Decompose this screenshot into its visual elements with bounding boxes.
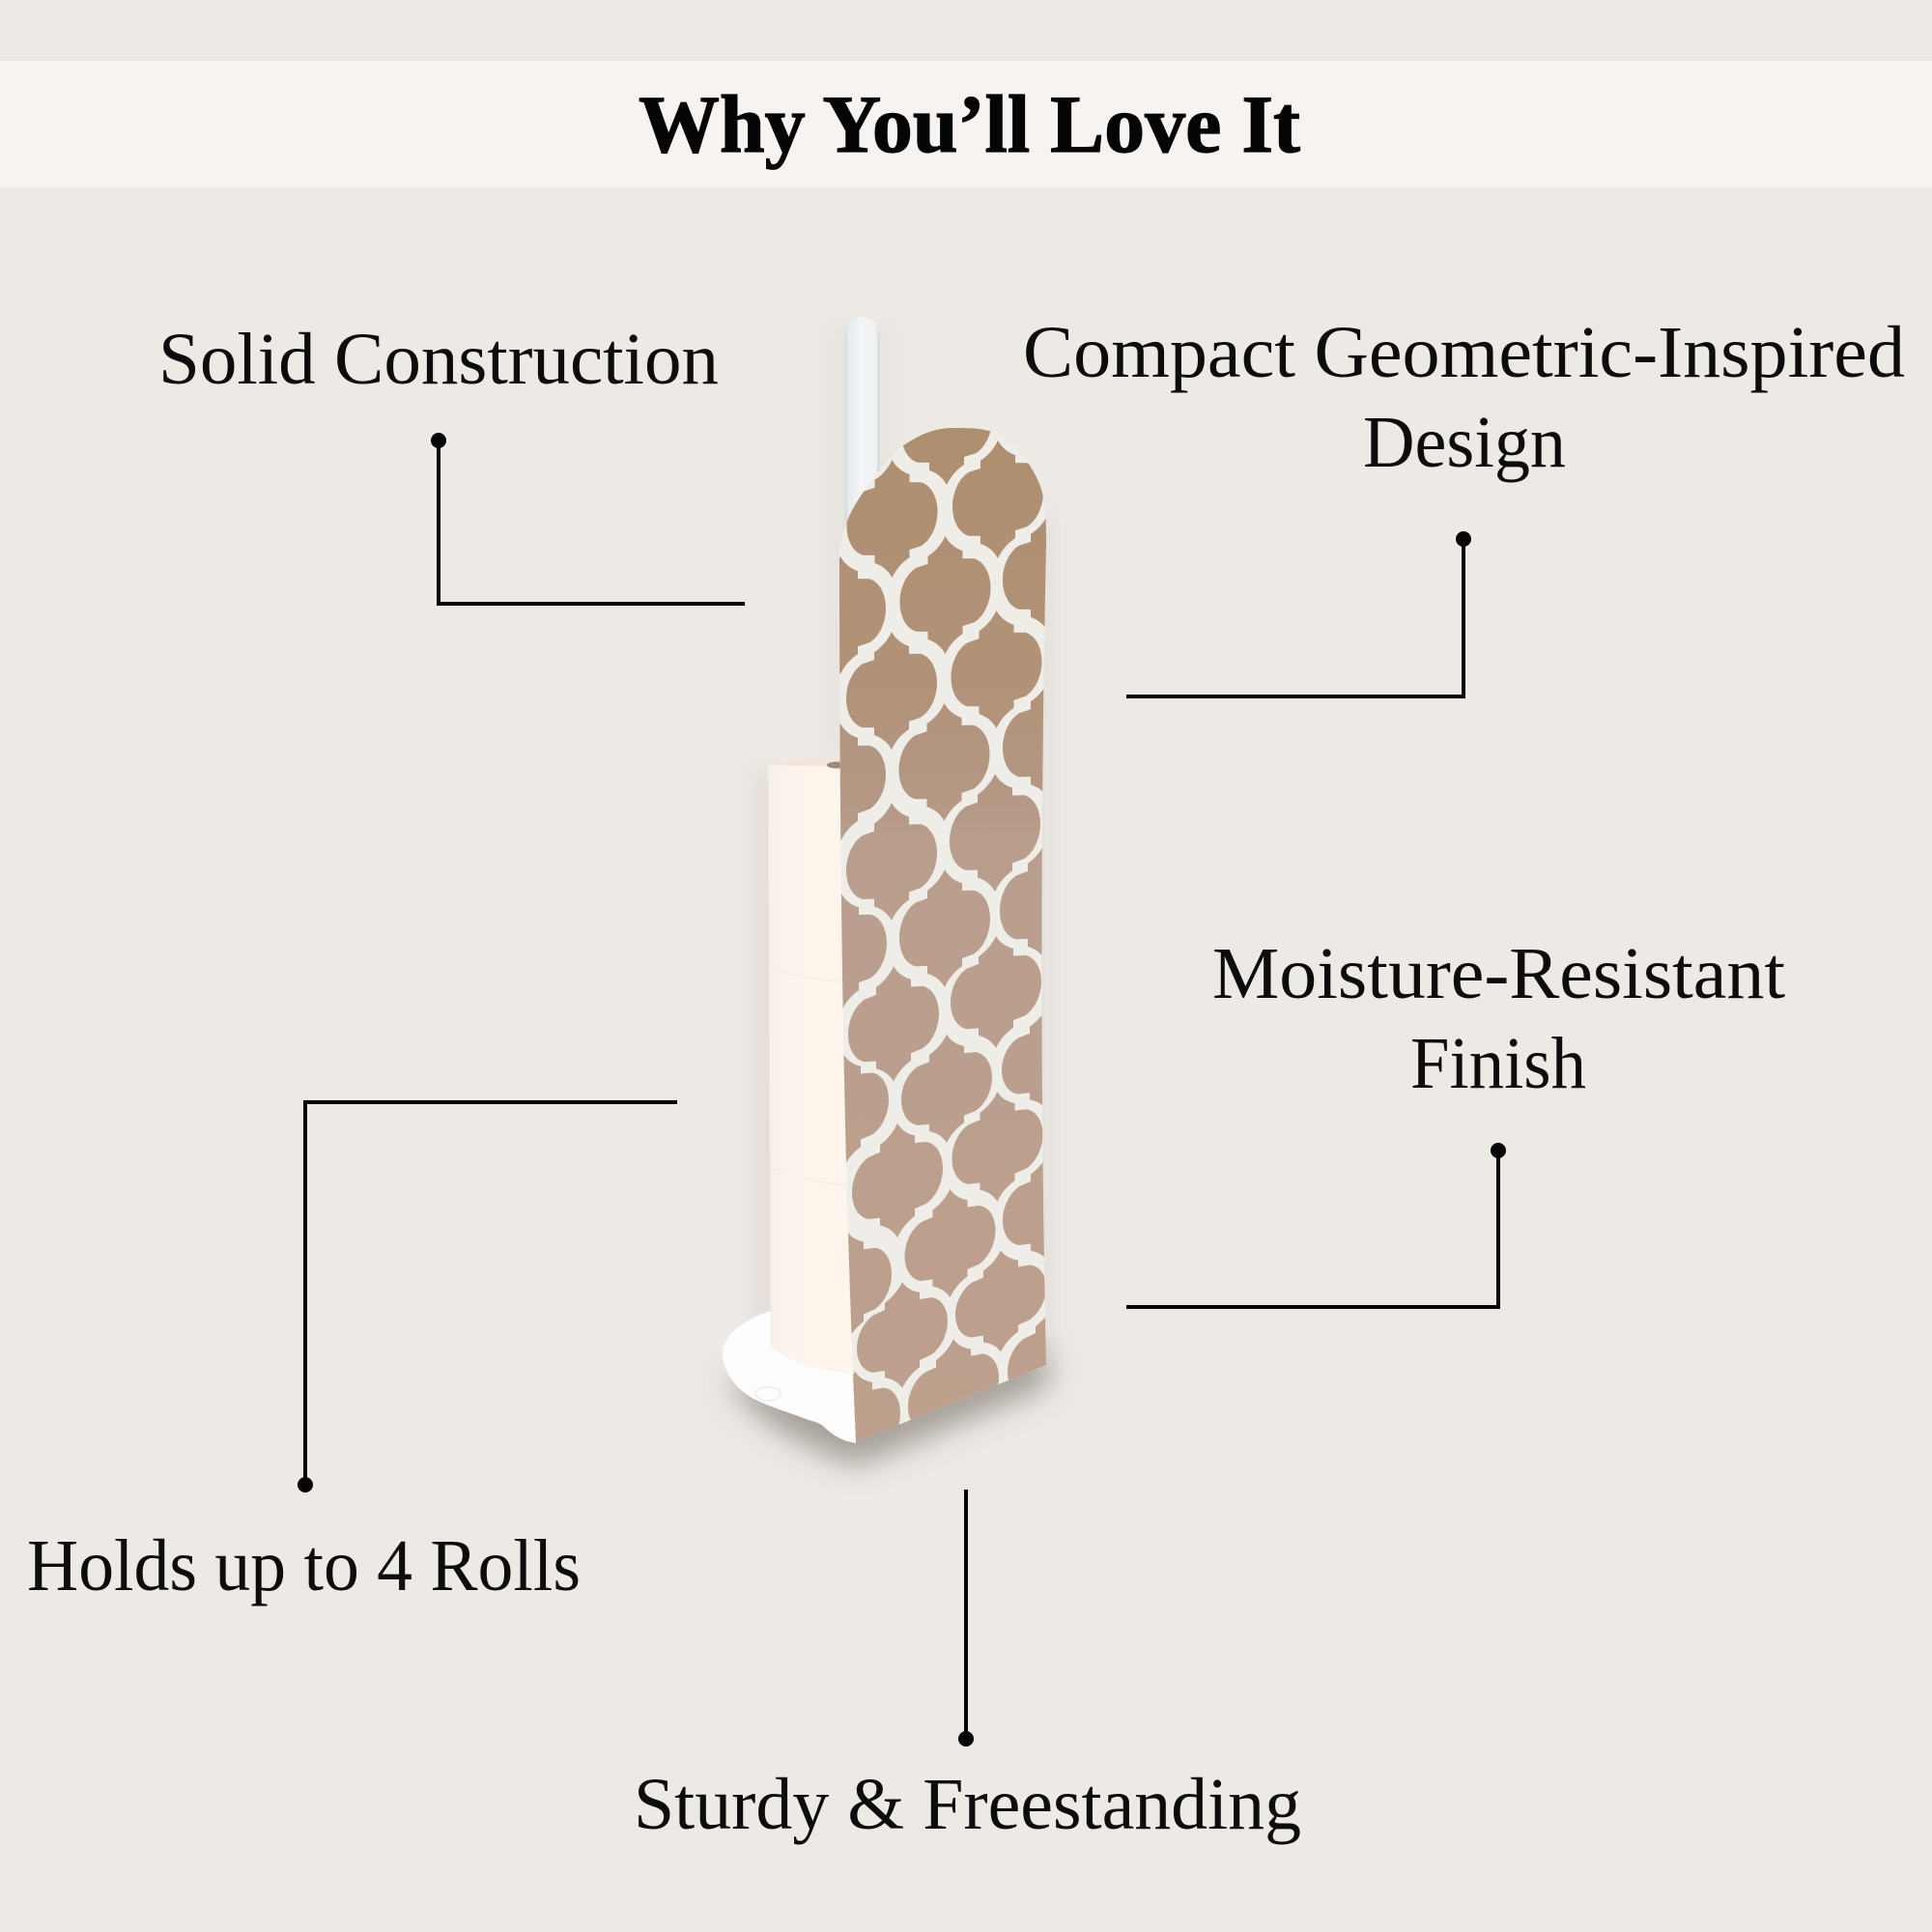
- label: Holds up to 4 Rolls: [27, 1525, 581, 1606]
- callout: holds up to 4 rolls: [27, 1102, 677, 1606]
- label: Compact Geometric-Inspired: [1023, 312, 1905, 393]
- label: [1212, 933, 1785, 1104]
- dot: [431, 433, 446, 448]
- label: Finish: [1410, 1023, 1586, 1104]
- base plate: [723, 1311, 869, 1443]
- leader line: [964, 1490, 968, 1739]
- title banner: [0, 61, 1932, 187]
- callout: compact design: [1023, 312, 1905, 696]
- callout: moisture-resistant finish: [1126, 933, 1785, 1307]
- label: Moisture-Resistant: [1212, 933, 1785, 1014]
- product: toilet paper holder: [723, 317, 1111, 1497]
- label: Solid Construction: [158, 319, 719, 400]
- pole: [845, 317, 879, 599]
- dot: [1491, 1143, 1506, 1158]
- label: [1023, 312, 1905, 483]
- label: Sturdy & Freestanding: [634, 1764, 1301, 1845]
- leader line: [439, 440, 745, 604]
- leader line: [1126, 1151, 1498, 1307]
- dot: [298, 1477, 313, 1492]
- dot: [1456, 531, 1471, 547]
- callout: solid construction: [158, 319, 745, 604]
- dot: [958, 1731, 974, 1747]
- leader line: [305, 1102, 677, 1485]
- product shadow: [726, 328, 1051, 1466]
- callout: sturdy and freestanding: [634, 1490, 1301, 1845]
- label: Design: [1363, 402, 1566, 483]
- lattice pattern: [839, 428, 1046, 1442]
- patterned front panel: [839, 428, 1046, 1442]
- toilet paper rolls: [768, 756, 869, 1374]
- title: Why You’ll Love It: [639, 79, 1300, 170]
- leader line: [1126, 539, 1463, 696]
